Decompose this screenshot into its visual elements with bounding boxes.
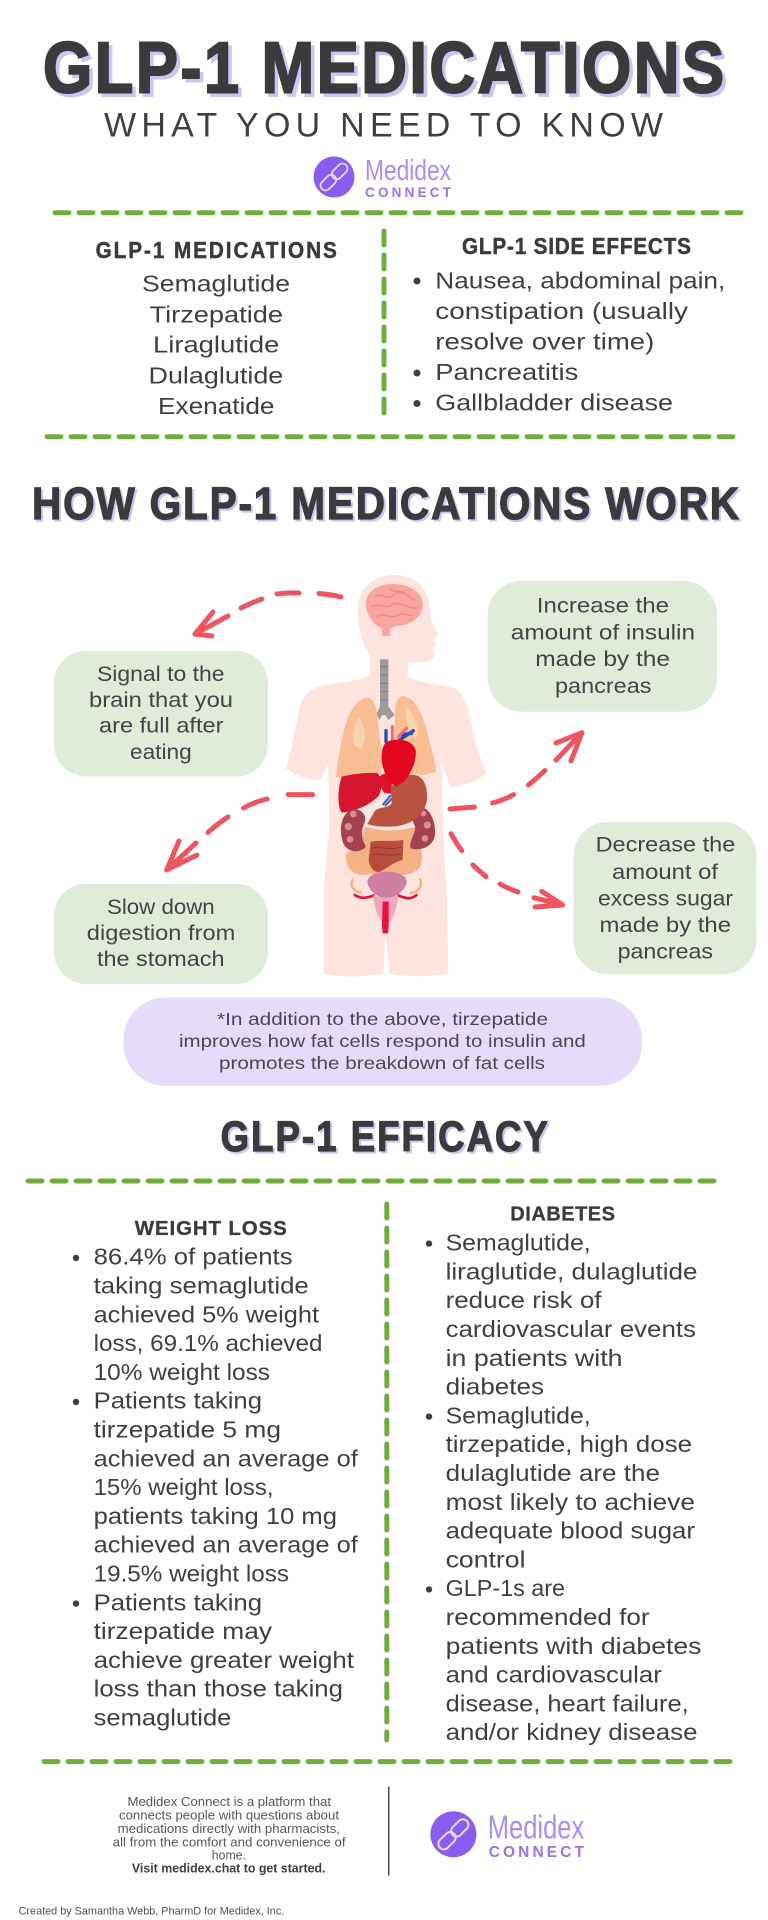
logo: Medidex Connect (footer): Medidex — [488, 1808, 585, 1846]
credit line: Created by Samantha Webb, PharmD for Medidex, Inc. — [19, 1906, 284, 1918]
side effects bullet list: Pancreatitis — [435, 359, 578, 385]
diabetes bullet list: patients with diabetes — [446, 1633, 702, 1659]
illustration: human body with organs — [286, 575, 486, 976]
footer: about Medidex Connect: connects people with questions about — [119, 1809, 340, 1823]
weight loss bullet list: 15% weight loss, — [94, 1474, 273, 1500]
weight loss bullet list: achieve greater weight — [94, 1647, 355, 1673]
logo: Medidex Connect (header) — [314, 155, 452, 200]
diabetes bullet list: liraglutide, dulaglutide — [446, 1258, 698, 1284]
weight loss bullet list: Patients taking — [94, 1388, 262, 1414]
heading: how GLP-1 medications work: HOW GLP-1 MEDICATIONS WORK — [34, 481, 741, 532]
lungs — [336, 696, 436, 777]
logo: Medidex Connect (header): CONNECT — [365, 185, 452, 200]
callout: signal to the brain: Signal to the — [97, 662, 224, 686]
callout: signal to the brain: eating — [130, 740, 192, 764]
footer: about Medidex Connect — [113, 1795, 346, 1876]
trachea — [377, 659, 395, 720]
diabetes bullet list: recommended for — [446, 1604, 650, 1630]
footer: about Medidex Connect: home. — [212, 1848, 246, 1862]
callout: increase insulin: pancreas — [555, 674, 652, 698]
intestines — [346, 827, 422, 875]
heading: weight loss: WEIGHT LOSS — [135, 1217, 287, 1240]
panel: GLP-1 side effects — [414, 233, 725, 416]
callout: increase insulin: Increase the — [537, 593, 669, 617]
liver — [338, 773, 381, 813]
logo: Medidex Connect (header): Medidex — [365, 155, 451, 187]
callout: decrease excess sugar: made by the — [600, 913, 731, 937]
subtitle: WHAT YOU NEED TO KNOW — [104, 106, 663, 144]
weight loss bullet list: tirzepatide may — [94, 1618, 273, 1644]
logo: Medidex Connect (footer): CONNECT — [489, 1844, 585, 1861]
callout: signal to the brain: brain that you — [89, 688, 233, 712]
weight loss bullet list: achieved an average of — [94, 1445, 358, 1471]
diabetes bullet list: GLP-1s are — [446, 1575, 565, 1601]
heading: GLP-1 medications: GLP-1 MEDICATIONS — [96, 237, 337, 263]
weight loss bullet list: semaglutide — [94, 1704, 231, 1730]
callout: decrease excess sugar — [574, 822, 756, 974]
diabetes bullet list: Semaglutide, — [446, 1402, 591, 1428]
heading: GLP-1 efficacy: GLP-1 EFFICACY — [221, 1113, 548, 1161]
side effects bullet list: Gallbladder disease — [435, 390, 673, 416]
heart — [382, 727, 416, 786]
stomach — [367, 775, 427, 827]
callout: decrease excess sugar: amount of — [612, 860, 718, 884]
brain — [366, 584, 423, 636]
medication names: Exenatide — [158, 393, 274, 419]
diabetes bullet list: diabetes — [446, 1374, 544, 1400]
diabetes bullet list: and/or kidney disease — [446, 1719, 698, 1745]
weight loss bullet list: loss, 69.1% achieved — [94, 1330, 322, 1356]
side effects bullet list: Nausea, abdominal pain, — [435, 267, 725, 293]
callout: decrease excess sugar: Decrease the — [596, 832, 735, 856]
diabetes bullet list: control — [446, 1546, 526, 1572]
heading: GLP-1 side effects: GLP-1 SIDE EFFECTS — [462, 233, 691, 259]
diabetes bullet list: cardiovascular events — [446, 1316, 696, 1342]
side effects bullet list: resolve over time) — [435, 329, 654, 355]
weight loss bullet list: 10% weight loss — [94, 1359, 270, 1385]
callout: signal to the brain — [54, 651, 268, 776]
diabetes bullet list — [426, 1230, 702, 1745]
medication names: Dulaglutide — [148, 362, 283, 388]
footer: about Medidex Connect: Medidex Connect is a platform that — [128, 1795, 332, 1809]
reproductive organs — [352, 878, 421, 933]
diabetes bullet list: in patients with — [446, 1345, 622, 1371]
medication names: Tirzepatide — [150, 301, 283, 327]
heading: how GLP-1 medications work: HOW GLP-1 MEDICATIONS WORK — [32, 479, 739, 530]
footer: about Medidex Connect: all from the comfort and convenience of — [113, 1835, 346, 1849]
diabetes bullet list: dulaglutide are the — [446, 1460, 660, 1486]
weight loss bullet list: 19.5% weight loss — [94, 1560, 289, 1586]
callout: increase insulin — [488, 581, 717, 712]
callout: tirzepatide note: promotes the breakdown of fat cells — [219, 1053, 545, 1073]
diabetes bullet list: reduce risk of — [446, 1287, 602, 1313]
diabetes bullet list: Semaglutide, — [446, 1230, 591, 1256]
side effects bullet list: constipation (usually — [435, 298, 689, 324]
diabetes bullet list: most likely to achieve — [446, 1489, 695, 1515]
callout: increase insulin: made by the — [535, 647, 670, 671]
callout: tirzepatide note — [124, 998, 642, 1086]
callout: increase insulin: amount of insulin — [511, 620, 695, 644]
weight loss bullet list: Patients taking — [94, 1589, 262, 1615]
callout: signal to the brain: are full after — [99, 714, 224, 738]
side effects bullet list — [414, 267, 725, 416]
weight loss bullet list: achieved 5% weight — [94, 1301, 320, 1327]
callout: slow digestion: digestion from — [87, 921, 235, 945]
weight loss bullet list: 86.4% of patients — [94, 1244, 293, 1270]
logo: Medidex Connect (footer) — [430, 1808, 585, 1861]
title: GLP-1 MEDICATIONS — [46, 32, 728, 112]
callout: slow digestion — [54, 884, 268, 984]
callout: decrease excess sugar: pancreas — [618, 940, 713, 964]
diabetes bullet list: tirzepatide, high dose — [446, 1431, 692, 1457]
heading: GLP-1 efficacy: GLP-1 EFFICACY — [223, 1115, 550, 1163]
diabetes bullet list: and cardiovascular — [446, 1662, 662, 1688]
arrow: excess sugar — [451, 834, 563, 907]
diabetes bullet list: disease, heart failure, — [446, 1690, 689, 1716]
callout: decrease excess sugar: excess sugar — [598, 886, 733, 910]
panel: GLP-1 medications list — [96, 237, 337, 419]
callout: slow digestion: the stomach — [97, 947, 224, 971]
blood vessels — [383, 795, 392, 806]
bladder — [367, 872, 407, 898]
medication names — [142, 271, 290, 419]
medication names: Liraglutide — [153, 332, 279, 358]
callout: slow digestion: Slow down — [107, 895, 215, 919]
weight loss bullet list: tirzepatide 5 mg — [94, 1416, 281, 1442]
footer: about Medidex Connect: Visit medidex.chat to get started. — [132, 1862, 326, 1876]
callout: tirzepatide note: improves how fat cells respond to insulin and — [179, 1031, 586, 1051]
weight loss bullet list: loss than those taking — [94, 1676, 343, 1702]
title: GLP-1 MEDICATIONS — [43, 29, 724, 108]
panel: diabetes — [426, 1203, 702, 1745]
panel: weight loss — [73, 1217, 358, 1730]
weight loss bullet list: taking semaglutide — [94, 1272, 309, 1298]
callout: tirzepatide note: *In addition to the above, tirzepatide — [217, 1009, 548, 1029]
weight loss bullet list: achieved an average of — [94, 1532, 358, 1558]
medication names: Semaglutide — [142, 271, 290, 297]
weight loss bullet list: patients taking 10 mg — [94, 1503, 337, 1529]
arrow: insulin — [450, 733, 582, 809]
footer: about Medidex Connect: medications directly with pharmacists, — [118, 1822, 340, 1836]
arrow: brain to signal box — [195, 593, 341, 636]
arrow: digestion — [167, 795, 313, 870]
kidneys — [341, 807, 435, 851]
weight loss bullet list — [73, 1244, 358, 1730]
diabetes bullet list: adequate blood sugar — [446, 1518, 695, 1544]
heading: diabetes: DIABETES — [510, 1203, 615, 1225]
body silhouette — [286, 575, 486, 976]
